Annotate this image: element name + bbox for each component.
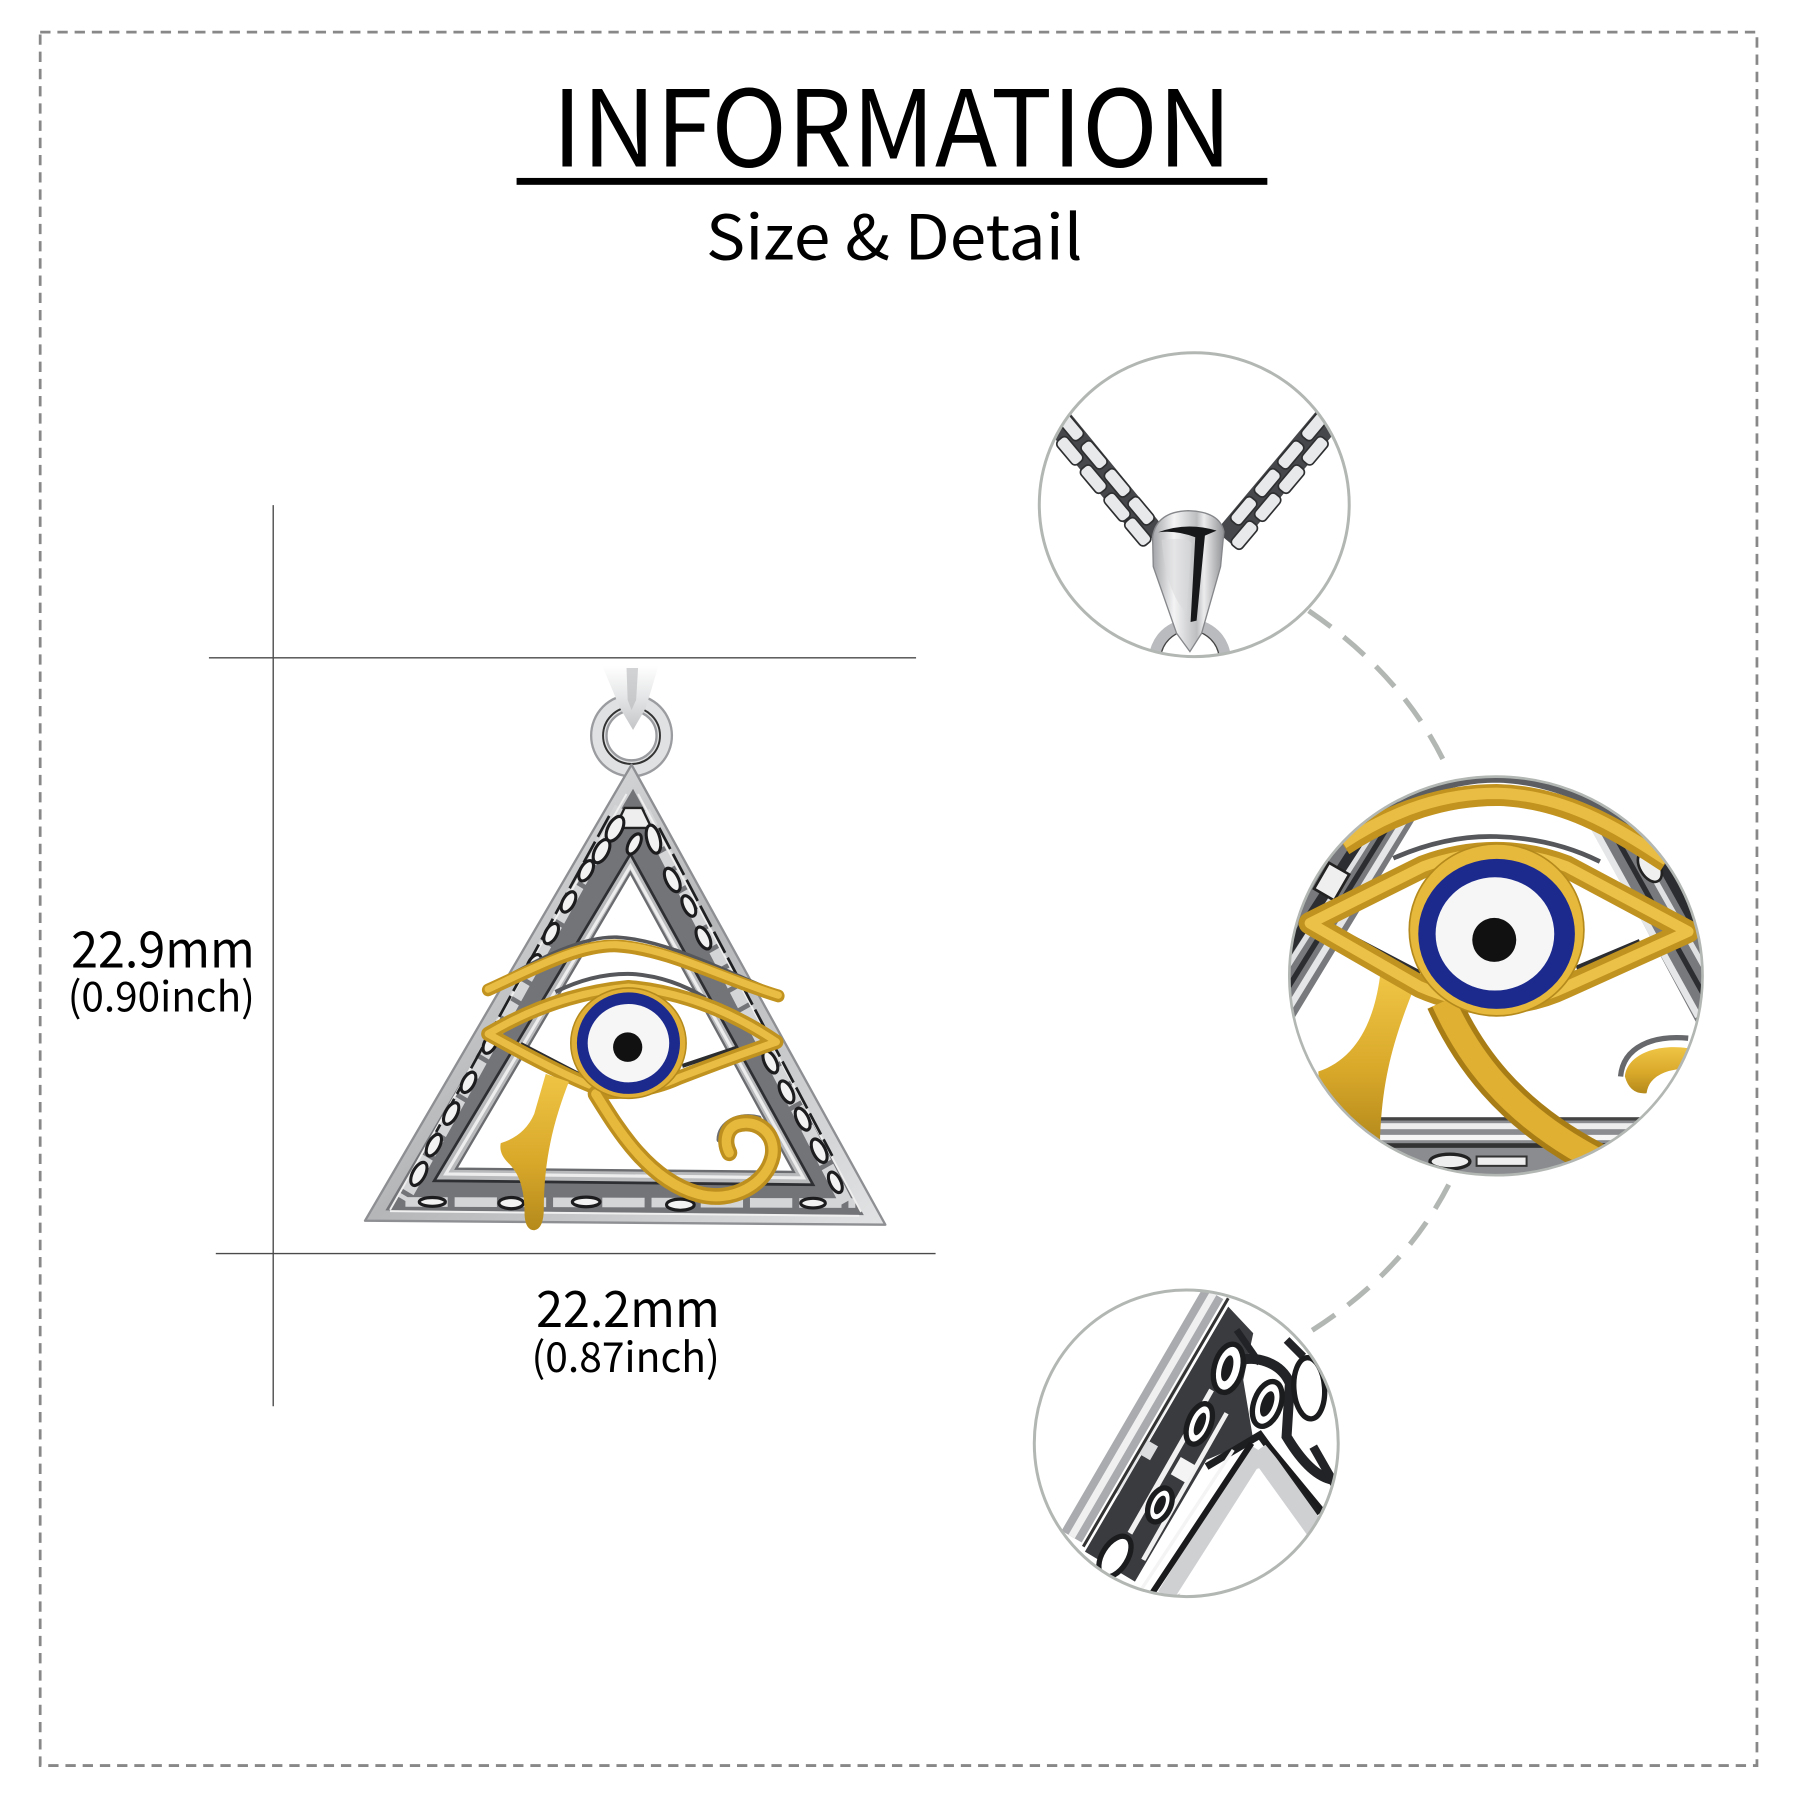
gold eye outline — [488, 987, 777, 1092]
height label: (0.90inch) — [68, 963, 255, 1023]
detail circle: enamel eye — [1280, 777, 1713, 1182]
frame bottom strip — [1380, 1117, 1640, 1174]
gold eyebrow — [488, 937, 778, 996]
gold tail — [1443, 1002, 1597, 1160]
gold curled tail — [596, 1094, 773, 1197]
eye shadow lines — [521, 974, 736, 1074]
heading underline — [517, 178, 1267, 185]
jump ring fragment — [1150, 622, 1230, 654]
height label — [68, 909, 255, 1023]
height label: 22.9mm — [71, 909, 255, 983]
pendant main image — [365, 666, 885, 1230]
title block — [517, 44, 1267, 277]
gold eye outline — [1310, 853, 1688, 1003]
width label: (0.87inch) — [532, 1324, 720, 1384]
outer rim bar — [1072, 1293, 1213, 1537]
inner rim — [1167, 1450, 1318, 1597]
bail top — [602, 666, 658, 730]
engraved band — [1072, 1293, 1340, 1597]
engraved ovals — [1092, 1341, 1327, 1583]
frame right strip — [1592, 830, 1702, 1022]
inner opening — [1177, 1468, 1258, 1594]
gold curl — [1621, 1038, 1688, 1093]
gold eyebrow — [1343, 779, 1667, 862]
triangle frame — [365, 765, 885, 1225]
gold teardrop — [1318, 977, 1413, 1143]
dimension lines — [209, 505, 936, 1406]
band ovals — [407, 813, 845, 1210]
frame left strip — [1290, 802, 1414, 1017]
heading: INFORMATION: INFORMATION — [552, 44, 1232, 197]
subheading: Size & Detail — [706, 187, 1083, 277]
detail circle: engraved frame — [1034, 1290, 1340, 1597]
ornamental band strokes — [390, 794, 861, 1216]
oval centres — [1151, 1354, 1277, 1516]
width label — [532, 1268, 720, 1384]
jump ring — [599, 703, 664, 768]
bail — [1153, 511, 1224, 652]
chain left — [1055, 411, 1156, 548]
gold teardrop — [500, 1074, 569, 1230]
detail circle: chain and bail — [1039, 353, 1349, 695]
dashed connector bottom — [1306, 1185, 1449, 1334]
dashed connector top — [1309, 611, 1449, 771]
chain right — [1227, 411, 1330, 551]
enamel eye iris — [571, 988, 686, 1098]
eye shadows — [1350, 836, 1640, 973]
width label: 22.2mm — [536, 1268, 720, 1342]
enamel eye iris — [1409, 844, 1584, 1016]
